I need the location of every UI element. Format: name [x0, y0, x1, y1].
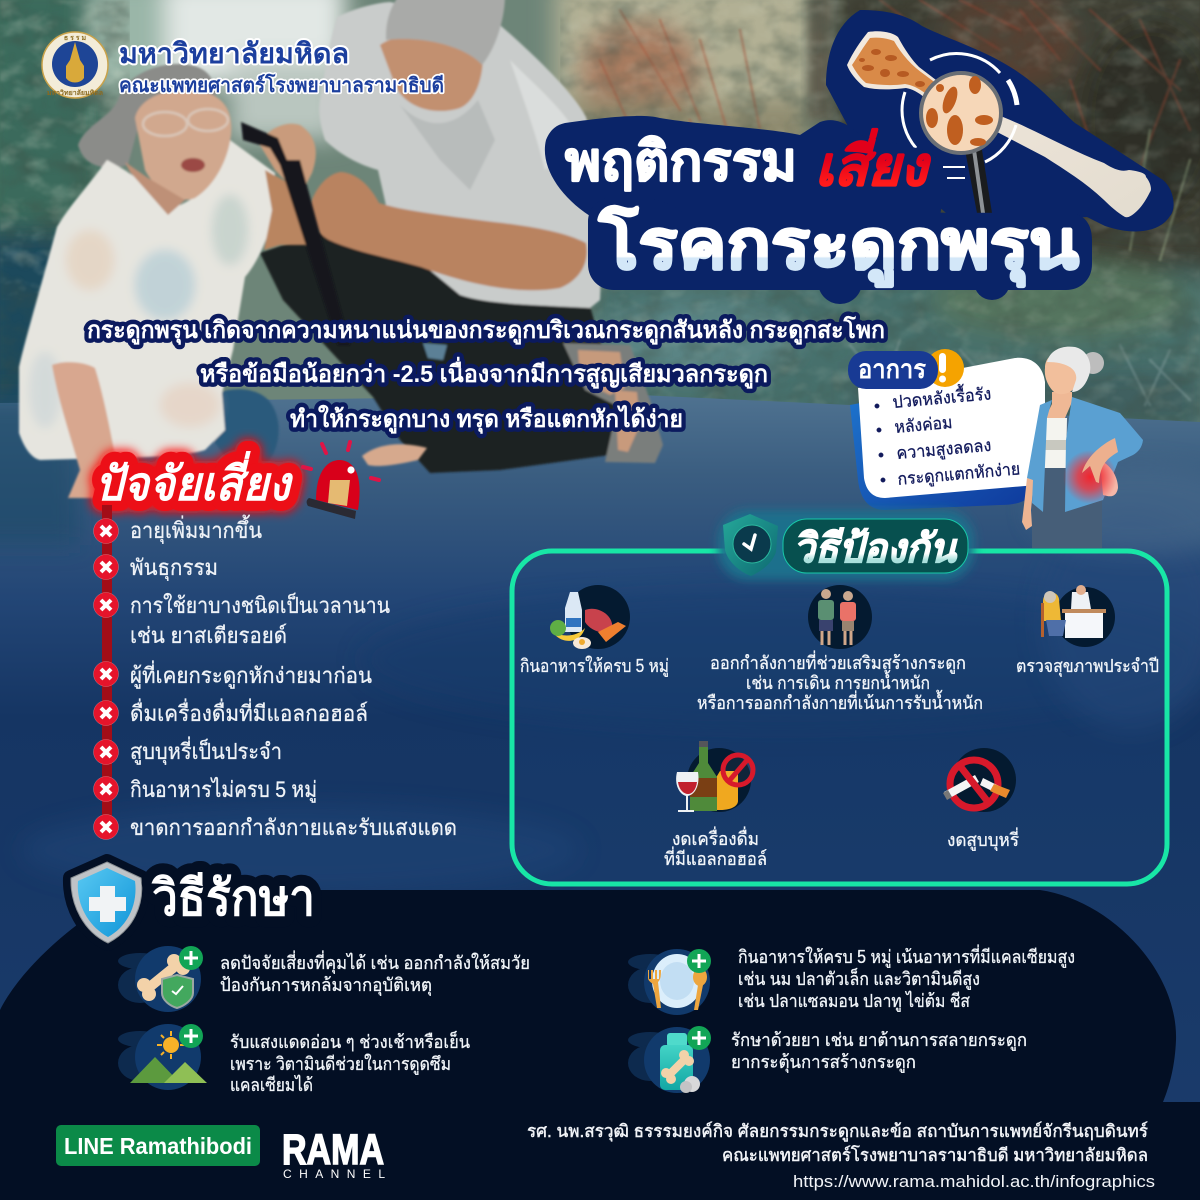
trousers — [1032, 468, 1102, 548]
credit text: คณะแพทยศาสตร์โรงพยาบาลรามาธิบดี มหาวิทยาลัยมหิดล — [722, 1145, 1148, 1165]
heading: risk factors: ปัจจัยเสี่ยง — [95, 450, 294, 510]
item: reduce controllable risks: ป้องกันการหกล้มจากอุบัติเหตุ — [220, 975, 432, 996]
man's sandal foot — [563, 343, 663, 463]
icon: check shield — [723, 514, 778, 576]
item: no smoking — [943, 748, 1019, 851]
neck — [1045, 392, 1072, 418]
item: medication: ยากระตุ้นการสร้างกระดูก — [731, 1052, 916, 1073]
risk item: unbalanced diet: กินอาหารไม่ครบ 5 หมู่ — [130, 777, 317, 803]
hip highlight — [1100, 460, 1118, 496]
title highlight: risk: เสี่ยง — [815, 128, 932, 197]
photo: elderly man helping — [260, 0, 663, 473]
risk item: lack of exercise and sun: ขาดการออกกำลังกายและรับแสงแดด — [130, 815, 457, 840]
heading: risk factors: ปัจจัยเสี่ยง — [95, 450, 294, 510]
left hand — [1022, 478, 1034, 530]
heading: prevention: วิธีป้องกัน — [793, 527, 958, 571]
icon: sun over mountains — [118, 1024, 207, 1090]
icon: cigarette with prohibition sign — [943, 760, 1010, 808]
symptoms list: หลังค่อม — [894, 413, 953, 437]
item: morning sunlight: รับแสงแดดอ่อน ๆ ช่วงเช้าหรือเย็น — [230, 1030, 470, 1052]
icon: elderly couple jogging — [818, 589, 856, 645]
item: calcium-rich diet — [628, 944, 1075, 1015]
woman's neck — [125, 162, 185, 215]
item: calcium-rich diet: เช่น นม ปลาตัวเล็ก และวิตามินดีสูง — [738, 967, 980, 990]
gap between legs — [423, 343, 447, 360]
pain glow — [1063, 450, 1117, 504]
header: university logo and name — [42, 32, 444, 98]
item: reduce controllable risks — [118, 946, 530, 1012]
item: no alcohol — [664, 741, 767, 869]
icon: bone with shield — [118, 946, 203, 1012]
credit text: รศ. นพ.สรวุฒิ ธรรรมยงค์กิจ ศัลยกรรมกระดูกและข้อ สถาบันการแพทย์จักรีนฤบดินทร์ — [527, 1121, 1148, 1142]
symptoms list: ความสูงลดลง — [896, 436, 992, 464]
woman's hand on cane — [260, 124, 316, 196]
item: exercise: หรือการออกกำลังกายที่เน้นการรับน้ำหนัก — [697, 690, 983, 713]
icon: alcohol with prohibition sign — [676, 741, 753, 812]
woman's mouth — [181, 158, 205, 172]
title backing blobs — [545, 116, 1092, 304]
man's trousers — [260, 233, 625, 473]
magnifier handle — [965, 150, 992, 213]
item: morning sunlight: แคลเซียมได้ — [230, 1074, 313, 1095]
badge: LINE Ramathibodi: LINE Ramathibodi — [64, 1133, 252, 1159]
credit text — [527, 1121, 1155, 1191]
item: annual check-up — [1016, 585, 1159, 677]
walking cane — [241, 122, 350, 345]
woman's face — [135, 90, 231, 200]
title — [545, 116, 1092, 304]
faculty name: คณะแพทยศาสตร์โรงพยาบาลรามาธิบดี — [119, 73, 444, 97]
item: medication — [628, 1026, 1027, 1093]
man's hair — [386, 0, 505, 65]
item: no alcohol: ที่มีแอลกอฮอล์ — [664, 846, 767, 869]
item: morning sunlight: เพราะ วิตามินดีช่วยในการดูดซึม — [230, 1053, 451, 1075]
risk item: long-term medication: เช่น ยาสเตียรอยด์ — [130, 623, 287, 648]
icon: Mahidol seal — [42, 32, 108, 98]
item: calcium-rich diet: เช่น ปลาแซลมอน ปลาทู ไข่ต้ม ชีส — [738, 990, 970, 1012]
title line 2: โรคกระดูกพรุน — [598, 205, 1079, 288]
symptoms list: ปวดหลังเรื้อรัง — [891, 381, 992, 412]
risk item: genetics: พันธุกรรม — [130, 555, 218, 581]
woman's knee — [213, 389, 279, 470]
icon: medicine bottle with bone — [628, 1026, 711, 1093]
intro paragraph: หรือข้อมือน้อยกว่า -2.5 เนื่องจากมีการสูญเสียมวลกระดูก — [200, 356, 768, 389]
item: exercise: ออกกำลังกายที่ช่วยเสริมสร้างกระดูก — [710, 650, 966, 674]
head — [1045, 353, 1078, 394]
icon: Mahidol seal: มหาวิทยาลัยมหิดล — [47, 89, 103, 97]
item: no smoking: งดสูบบุหรี่ — [947, 827, 1019, 851]
man's arm and hand — [310, 172, 587, 290]
university name: มหาวิทยาลัยมหิดล — [119, 38, 349, 69]
woman's toes — [362, 444, 427, 466]
symptoms list: กระดูกแตกหักง่าย — [897, 459, 1021, 490]
symptoms heading pill: อาการ — [858, 354, 926, 384]
icon: red siren — [303, 442, 379, 519]
icon: medical shield — [71, 862, 142, 943]
intro paragraph: ทำให้กระดูกบาง ทรุด หรือแตกหักได้ง่าย — [290, 404, 683, 435]
item: medication: รักษาด้วยยา เช่น ยาต้านการสลายกระดูก — [731, 1030, 1027, 1051]
item: reduce controllable risks: ลดปัจจัยเสี่ยงที่คุมได้ เช่น ออกกำลังให้สมวัย — [220, 950, 530, 974]
icon: Mahidol seal: ธ ร ร ม — [64, 35, 87, 42]
icon: plate with fork and spoon — [628, 949, 711, 1015]
risk item: age — [94, 515, 262, 544]
panel: treatment — [71, 862, 1075, 1095]
item: balanced diet: กินอาหารให้ครบ 5 หมู่ — [520, 655, 669, 677]
bone shaft and epiphysis — [847, 31, 1151, 217]
bun — [1082, 352, 1104, 374]
footer — [56, 1121, 1155, 1191]
cancellous bone cross-section — [852, 38, 945, 93]
road — [0, 395, 1200, 1200]
top — [1043, 418, 1067, 468]
risk item: long-term medication: การใช้ยาบางชนิดเป็นเวลานาน — [130, 591, 390, 618]
man's polo shirt — [319, 2, 601, 308]
risk item: smoking — [94, 736, 282, 765]
risk item: alcohol: ดื่มเครื่องดื่มที่มีแอลกอฮอล์ — [130, 698, 368, 726]
icon: doctor consultation — [1041, 585, 1106, 638]
icon: exclamation badge — [926, 349, 964, 387]
intro paragraph: กระดูกพรุน เกิดจากความหนาแน่นของกระดูกบริเวณกระดูกสันหลัง กระดูกสะโพก — [87, 315, 885, 346]
woman's arm and hand — [52, 362, 118, 498]
bottom dark panel — [0, 890, 1200, 1200]
item: balanced diet — [520, 585, 669, 677]
woman's glasses — [143, 109, 228, 136]
item: annual check-up: ตรวจสุขภาพประจำปี — [1016, 656, 1159, 677]
man's face — [380, 33, 483, 111]
hand on hip — [1082, 438, 1118, 483]
risk item: long-term medication — [94, 591, 390, 648]
risk item: smoking: สูบบุหรี่เป็นประจำ — [130, 736, 282, 765]
icon: bone under magnifier sticker — [826, 10, 1174, 231]
credit text: https://www.rama.mahidol.ac.th/infographics — [793, 1172, 1155, 1191]
badge: LINE Ramathibodi — [56, 1125, 260, 1166]
cardigan — [1027, 400, 1052, 512]
intro paragraph — [87, 315, 885, 435]
logo: RAMA Channel: RAMA — [282, 1126, 384, 1174]
illustration: woman with back pain — [1022, 347, 1143, 548]
symptoms heading pill — [848, 351, 938, 389]
risk item: age: อายุเพิ่มมากขึ้น — [130, 515, 262, 544]
item: exercise — [697, 585, 983, 713]
photo: elderly woman falling — [19, 64, 427, 498]
hair — [1047, 347, 1090, 392]
symptoms list — [875, 381, 1021, 490]
magnifier lens — [921, 73, 1001, 153]
item: no alcohol: งดเครื่องดื่ม — [672, 826, 759, 849]
heading glow backing — [718, 510, 974, 580]
scan rings — [902, 54, 1017, 162]
panel: prevention — [512, 510, 1167, 884]
woman's hair — [78, 64, 216, 168]
panel: risk factor list — [94, 505, 457, 840]
title line 1: พฤติกรรม — [565, 132, 797, 192]
item: exercise: เช่น การเดิน การยกน้ำหนัก — [746, 670, 930, 693]
risk item: previous fracture: ผู้ที่เคยกระดูกหักง่ายมาก่อน — [130, 660, 372, 689]
icon: food group — [550, 592, 626, 649]
risk item: genetics — [94, 554, 218, 581]
item: morning sunlight — [118, 1024, 470, 1095]
woman's raised arm — [264, 170, 310, 250]
panel: symptoms card — [848, 349, 1045, 510]
logo: RAMA Channel: CHANNEL — [283, 1167, 385, 1181]
item: calcium-rich diet: กินอาหารให้ครบ 5 หมู่ เน้นอาหารที่มีแคลเซียมสูง — [738, 944, 1075, 968]
heading: treatment: วิธีรักษา — [151, 870, 315, 926]
woman's blouse — [19, 140, 275, 460]
